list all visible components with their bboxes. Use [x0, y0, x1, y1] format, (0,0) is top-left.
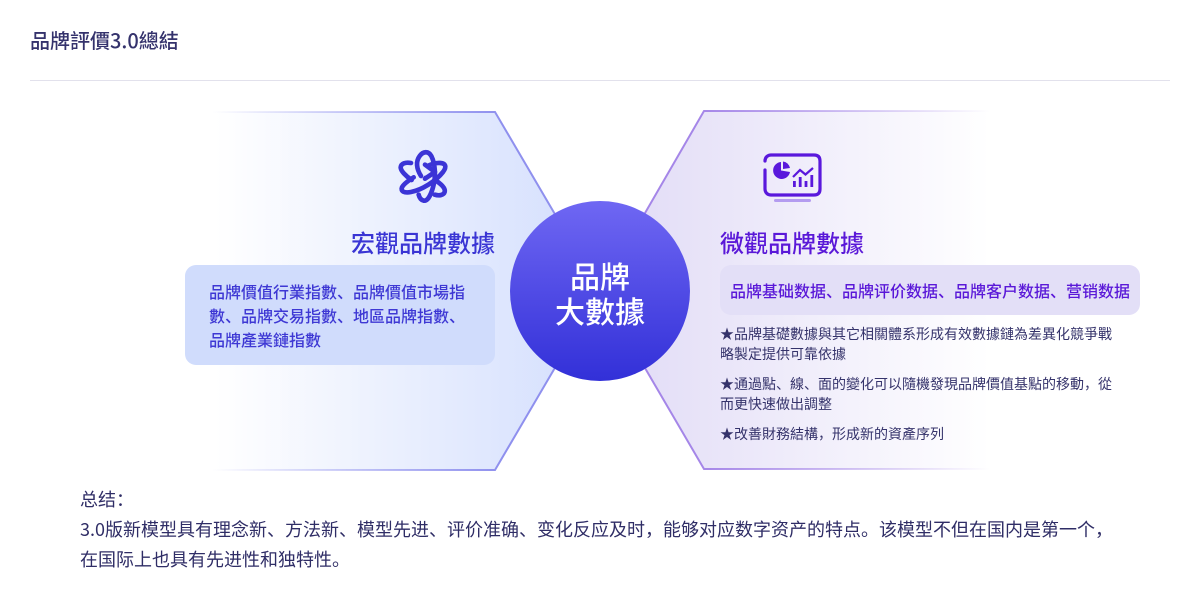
summary text: 在国际上也具有先进性和独特性。 [80, 546, 350, 572]
center label [555, 253, 645, 332]
heading: macro: 宏觀品牌數據 [351, 224, 495, 259]
heading: micro: 微觀品牌數據 [720, 224, 864, 259]
micro bullet list: ★品牌基礎數據與其它相關體系形成有效數據鏈為差異化競爭戰 [720, 324, 1112, 344]
macro indicators text [209, 279, 465, 351]
macro indicators text: 品牌產業鏈指數 [209, 327, 321, 351]
micro data box [720, 265, 1140, 315]
micro bullet list: ★改善財務結構，形成新的資產序列 [720, 424, 944, 444]
summary text: 总结： [80, 486, 134, 512]
title: 品牌評價3.0總結 [30, 25, 179, 54]
icon: data screen [765, 155, 820, 202]
center label: 品牌 [570, 253, 630, 297]
panel: micro hexagon [600, 111, 990, 469]
macro indicators text: 品牌價值行業指數、品牌價值市場指 [209, 279, 465, 303]
panel: macro hexagon [212, 112, 600, 470]
icon: atom [401, 152, 445, 201]
central circle [510, 201, 690, 381]
macro indicators text: 數、品牌交易指數、地區品牌指數、 [209, 303, 465, 327]
micro data text: 品牌基础数据、品牌评价数据、品牌客户数据、营销数据 [730, 278, 1130, 302]
micro bullet list [720, 324, 1112, 444]
summary text: 3.0版新模型具有理念新、方法新、模型先进、评价准确、变化反应及时，能够对应数字资产的特点。该模型不但在国内是第一个， [80, 516, 1113, 542]
micro bullet list: 略製定提供可靠依據 [720, 344, 846, 364]
summary text [80, 486, 1113, 572]
center label: 大數據 [555, 288, 645, 332]
micro bullet list: ★通過點、線、面的變化可以隨機發現品牌價值基點的移動，從 [720, 374, 1112, 394]
macro indicators box [185, 265, 495, 365]
micro bullet list: 而更快速做出調整 [720, 394, 832, 414]
